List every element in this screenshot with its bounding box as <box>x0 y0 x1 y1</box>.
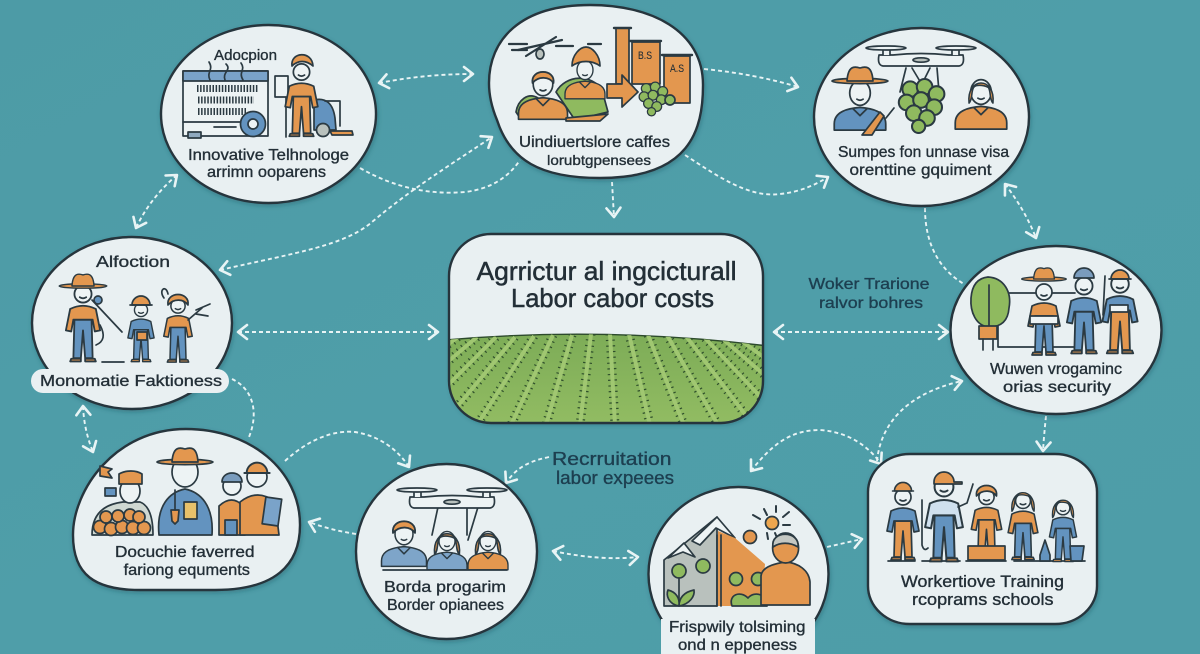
node outline <box>489 5 703 178</box>
field illustration <box>450 334 762 422</box>
title: Labor cabor costs <box>511 283 714 313</box>
panel background <box>449 234 763 423</box>
chart labels <box>638 50 684 75</box>
icon: farmer with hat <box>832 67 894 135</box>
chart labels: A.S <box>670 63 684 75</box>
panel outline <box>449 234 763 423</box>
node label: orenttine gquiment <box>850 162 992 179</box>
node outline <box>161 25 376 203</box>
panel: favored farming equipment <box>73 429 300 590</box>
node label: arrimn ooparens <box>207 164 326 181</box>
label patch: ond n eppeness <box>678 637 797 654</box>
icon: five workers <box>887 472 1085 562</box>
chart labels: B.S <box>638 50 652 62</box>
node label: fariong equments <box>124 562 250 579</box>
icon: worker with harvest <box>92 466 153 536</box>
adoption heading: Adocpion <box>214 47 277 64</box>
label pill: Monomatie Faktioness <box>40 373 222 390</box>
callout: worker training: ralvor bohres <box>819 295 923 312</box>
panel: mechanization workers <box>31 237 232 409</box>
node label <box>188 147 349 181</box>
panel: innovative technology adoption <box>161 25 376 203</box>
node label <box>990 361 1122 396</box>
label pill <box>31 369 229 393</box>
icon: technician <box>275 55 353 137</box>
callout: recruitation: Recrruitation <box>552 449 672 469</box>
node outline <box>648 487 828 654</box>
node label: Sumpes fon unnase visa <box>838 144 1009 161</box>
icon: drone <box>397 488 507 540</box>
connector arrows <box>83 69 1046 558</box>
node outline <box>32 237 232 409</box>
callout: worker training: Woker Trarione <box>808 276 930 293</box>
node label: Uindiuertslore caffes <box>519 134 670 151</box>
icon: two workers with clipboard <box>219 463 282 535</box>
node label: Wuwen vrogaminc <box>990 361 1122 378</box>
icon: farm workers <box>1022 268 1138 355</box>
panel: understanding labor expenses <box>489 5 703 178</box>
node label <box>384 579 506 614</box>
label patch: Frispwily tolsiming <box>669 619 806 636</box>
panel: border programs <box>356 464 537 639</box>
icon: three workers <box>59 274 210 362</box>
icon: three people <box>382 521 508 570</box>
callout: recruitation: labor expeees <box>556 468 674 488</box>
icon: sun <box>753 506 790 540</box>
node outline <box>868 454 1097 624</box>
node outline <box>814 28 1029 206</box>
icon: woman with headset <box>955 80 1007 129</box>
icon: farm machine <box>183 62 268 138</box>
node label: orias security <box>1003 379 1111 396</box>
node outline <box>950 246 1162 414</box>
icon: older farmer <box>761 533 810 605</box>
icon: small drone <box>509 37 601 59</box>
icon: mountain landscape <box>664 517 767 606</box>
callout: recruitation <box>552 449 674 488</box>
node label: Borda progarim <box>384 579 506 596</box>
icon: tree and fence <box>971 277 1080 350</box>
panel: friendly training <box>648 487 828 654</box>
heading: Alfoction <box>96 254 170 271</box>
node label <box>115 544 254 579</box>
callout: worker training <box>808 276 930 312</box>
node outline <box>356 464 537 639</box>
panel: worker programs security <box>950 246 1162 414</box>
label patch <box>661 619 815 654</box>
node label: Workertiove Training <box>901 573 1064 591</box>
node label <box>838 144 1009 179</box>
node label <box>519 134 670 168</box>
icon: cost bars and arrow <box>607 28 692 116</box>
panel: worker training programs <box>868 454 1097 624</box>
node label: Docuchie faverred <box>115 544 254 561</box>
panel: drone equipment <box>814 28 1029 206</box>
node label: Border opianees <box>387 597 504 614</box>
node label: lorubtgpensees <box>547 152 651 168</box>
node label <box>901 573 1064 609</box>
title: Agrrictur al ingcicturall <box>476 256 736 286</box>
node label: rcoprams schools <box>912 591 1054 609</box>
panel: central labor costs <box>448 232 766 426</box>
icon: farmers with crops <box>516 47 608 121</box>
icon: central farmer <box>157 448 213 535</box>
node label: Innovative Telhnologe <box>188 147 349 164</box>
node outline <box>73 429 300 590</box>
icon: drone with grapes <box>866 46 976 133</box>
title <box>476 256 736 313</box>
